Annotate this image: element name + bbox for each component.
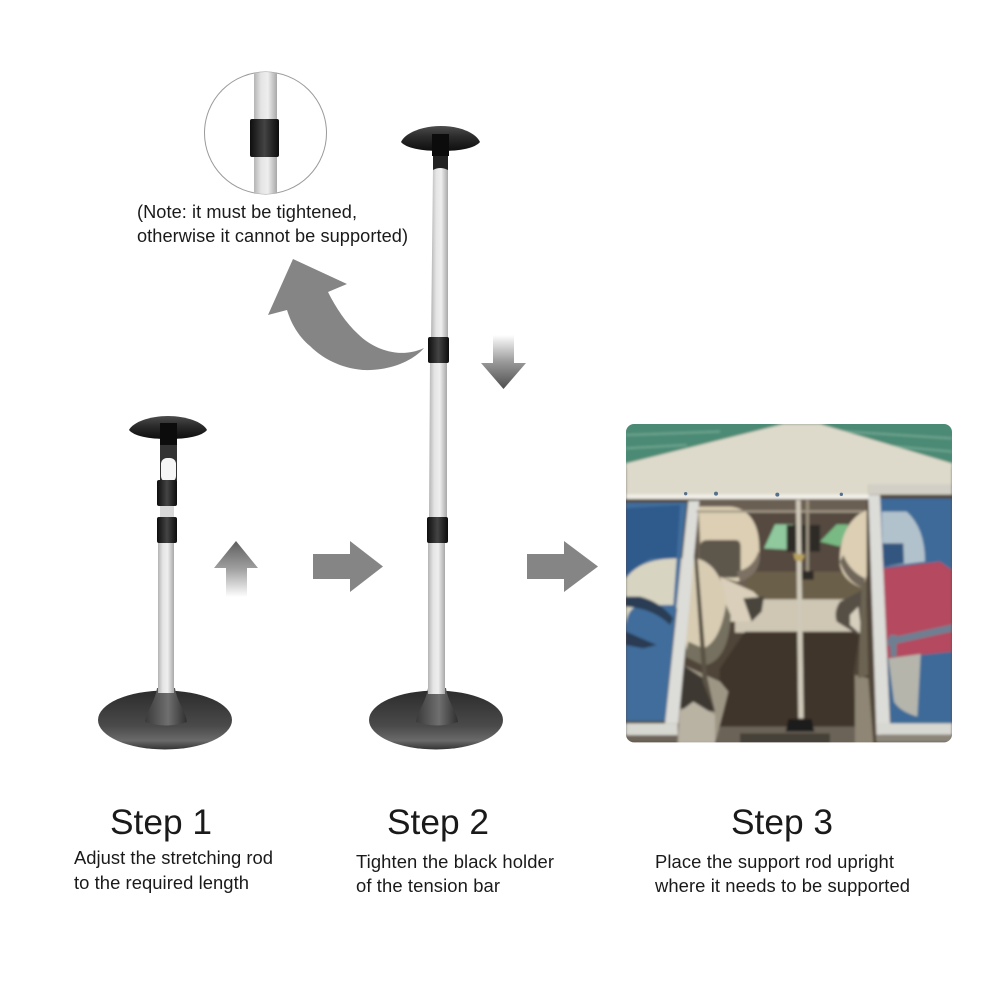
step 1 description: Adjust the stretching rod — [74, 847, 273, 868]
step 1 description: to the required length — [74, 872, 249, 893]
support rod step 2 — [369, 126, 503, 750]
up arrow — [214, 541, 258, 597]
step 2 heading: Step 2 — [387, 803, 489, 842]
down arrow — [481, 335, 526, 389]
step 1 description — [74, 847, 273, 893]
support rod step 1 — [98, 416, 232, 750]
step 2 description: Tighten the black holder — [356, 851, 554, 872]
right arrow 2 — [527, 541, 598, 592]
photo: boat canopy with support rod — [620, 415, 960, 748]
step 2 description: of the tension bar — [356, 875, 500, 896]
curved arrow — [268, 259, 424, 370]
step 3 description — [654, 851, 910, 896]
note text: (Note: it must be tightened, — [137, 202, 357, 222]
step 2 description — [356, 851, 554, 896]
step 3 description: Place the support rod upright — [655, 851, 894, 872]
step 3 heading: Step 3 — [731, 803, 833, 842]
step 3 description: where it needs to be supported — [654, 875, 910, 896]
note text — [137, 202, 408, 246]
step 1 heading: Step 1 — [110, 803, 212, 842]
magnified detail circle — [204, 70, 326, 200]
note text: otherwise it cannot be supported) — [137, 226, 408, 246]
right arrow 1 — [313, 541, 383, 592]
